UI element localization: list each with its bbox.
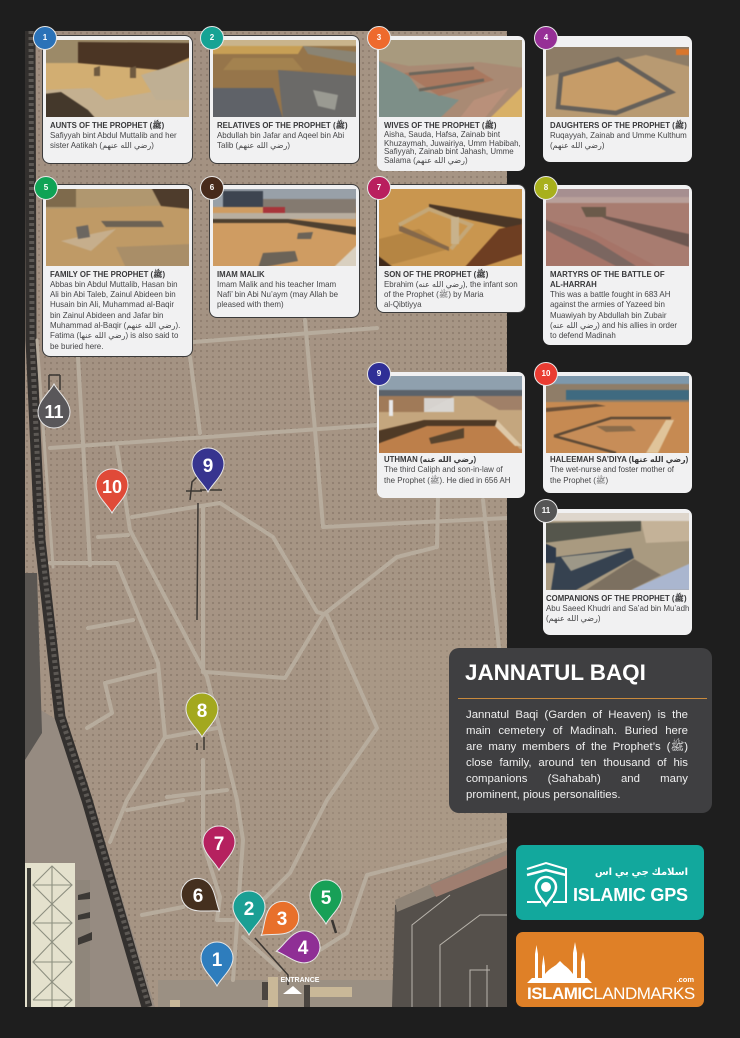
text: daughters xyxy=(550,120,687,150)
text: companions xyxy=(546,592,689,624)
text: wives: WIVES OF THE PROPHET (ﷺ) xyxy=(384,120,497,130)
cemetery pathways xyxy=(37,320,507,980)
text: wives: Salama (رضي الله عنهم) xyxy=(384,156,468,165)
text: family: be buried here. xyxy=(50,342,103,351)
text: wives: Aisha, Sauda, Hafsa, Zainab bint xyxy=(384,130,500,139)
badge 6 xyxy=(200,176,224,200)
text: family: Husain bin Ali, Muhammad al-Baqir xyxy=(50,300,174,309)
badge 11 xyxy=(534,499,558,523)
logo: Islamic GPS xyxy=(516,845,704,920)
text: aunts: Safiyyah bint Abdul Muttalib and her xyxy=(50,131,177,140)
badge 7: 7 xyxy=(377,183,381,192)
pin 11: 11 xyxy=(44,402,64,422)
text: haleemah: the Prophet (ﷺ) xyxy=(550,476,608,485)
text: martyrs: AL-HARRAH xyxy=(550,280,597,289)
card 2: relatives of the prophet xyxy=(210,36,359,163)
mosque roof xyxy=(25,863,92,1018)
aerial map of the cemetery xyxy=(25,31,507,1007)
photo: daughters graves xyxy=(546,47,689,117)
.com: .com xyxy=(676,975,694,984)
text: haleemah xyxy=(550,455,688,485)
entrance marker: ENTRANCE xyxy=(281,977,320,984)
text: son: Ebrahim (رضي الله عنه), the infant son xyxy=(384,280,518,289)
entrance marker xyxy=(281,977,320,994)
description text xyxy=(466,709,688,801)
pin 1: 1 xyxy=(212,950,223,971)
badge 10: 10 xyxy=(542,369,550,378)
text: family: Muhammad al-Baqir (رضي الله عنهم). xyxy=(50,321,180,330)
description text: Jannatul Baqi (Garden of Heaven) is the xyxy=(466,709,688,721)
text: martyrs: against the armies of Yazeed bin xyxy=(550,300,665,309)
text: imam malik: Nafi’ bin Abi Nu’aym (may Allah be xyxy=(217,290,338,299)
photo: martyrs graves xyxy=(546,189,689,266)
card 10: haleemah sa'diya xyxy=(543,372,692,493)
text: relatives: RELATIVES OF THE PROPHET (ﷺ) xyxy=(217,120,348,130)
wordmark: ISLAMIC GPS xyxy=(573,885,688,905)
text: family: FAMILY OF THE PROPHET (ﷺ) xyxy=(50,270,165,278)
text: wives xyxy=(384,120,521,166)
panel: Jannatul Baqi description xyxy=(449,648,712,813)
pin 5: 5 xyxy=(321,888,332,909)
text: imam malik xyxy=(217,270,338,309)
badge 7 xyxy=(367,176,391,200)
badge 10 xyxy=(534,362,558,386)
badge 9: 9 xyxy=(377,369,381,378)
pin 10 xyxy=(96,469,128,513)
pin 3 xyxy=(251,895,305,948)
text: martyrs: to defend Madinah xyxy=(550,331,616,340)
card 1: aunts of the prophet xyxy=(43,36,192,163)
pin 8: 8 xyxy=(197,701,207,722)
icon: mosque silhouette xyxy=(527,942,592,983)
text: martyrs: MARTYRS OF THE BATTLE OF xyxy=(550,270,665,278)
card 11: companions of the prophet xyxy=(543,509,692,635)
pin 10: 10 xyxy=(102,477,122,497)
pin 1 xyxy=(201,942,233,986)
pin 4 xyxy=(274,929,322,967)
badge 3: 3 xyxy=(377,33,381,42)
pin 6: 6 xyxy=(193,886,203,907)
pin 6 xyxy=(175,872,229,924)
wordmark: ISLAMICLANDMARKS xyxy=(527,984,695,1003)
badge 2 xyxy=(200,26,224,50)
text: aunts xyxy=(50,120,177,150)
description text: prominent, pious personalities. xyxy=(466,789,620,801)
text: wives: Safiyyah, Zainab bint Jahash, Umme xyxy=(384,147,514,156)
icon: kaaba pin xyxy=(526,862,567,907)
pin 7 xyxy=(203,826,235,870)
badge 3 xyxy=(367,26,391,50)
text: daughters: (رضي الله عنهم) xyxy=(550,141,604,150)
text: martyrs xyxy=(550,270,677,340)
description text: are many members of the Prophet’s (ﷺ) xyxy=(466,741,688,753)
text: haleemah: The wet-nurse and foster mother of xyxy=(550,465,674,474)
text: martyrs: This was a battle fought in 683 AH xyxy=(550,290,670,299)
text: aunts: sister Aatikah (رضي الله عنهم) xyxy=(50,141,154,150)
description text: close family, around ten thousand of his xyxy=(466,757,688,769)
photo: son grave xyxy=(379,189,522,266)
photo: companions graves xyxy=(546,513,689,590)
text: imam malik: pleased with them) xyxy=(217,300,284,309)
photo: relatives graves xyxy=(213,40,356,117)
text: daughters: Ruqayyah, Zainab and Umme Kulthum xyxy=(550,131,687,140)
pin 5 xyxy=(310,880,342,924)
text: imam malik: Imam Malik and his teacher Imam xyxy=(217,280,336,289)
photo: family graves xyxy=(46,189,189,266)
text: companions: Abu Saeed Khudri and Sa’ad bin Mu’adh xyxy=(546,604,689,613)
pin 9 xyxy=(192,448,224,492)
badge 6: 6 xyxy=(210,183,214,192)
pin 2 xyxy=(233,891,265,935)
text: family: Ali bin Abi Taleb, Zainul Abideen bin xyxy=(50,290,176,299)
card 3: wives of the prophet xyxy=(377,36,525,171)
text: relatives: Abdullah bin Jafar and Aqeel bin Abi xyxy=(217,131,344,140)
badge 8: 8 xyxy=(544,183,548,192)
text: family xyxy=(50,268,180,351)
text: family: bin Zainul Abideen and Jafar bin xyxy=(50,311,163,320)
text: imam malik: IMAM MALIK xyxy=(217,270,265,278)
text: uthman: UTHMAN (رضي الله عنه) xyxy=(384,455,476,464)
pin 11 xyxy=(38,384,70,428)
text: companions: (رضي الله عنهم) xyxy=(546,614,600,623)
card 8: martyrs of the battle of al-harrah xyxy=(543,185,692,345)
pin 4: 4 xyxy=(298,938,309,959)
photo: wives graves xyxy=(379,40,522,117)
description text: companions (Sahabah) and many xyxy=(466,773,688,785)
badge 11: 11 xyxy=(542,506,550,515)
badge 1: 1 xyxy=(43,33,47,42)
card 6: imam malik xyxy=(210,185,359,317)
text: aunts: AUNTS OF THE PROPHET (ﷺ) xyxy=(50,120,164,130)
Arabic wordmark: اسلامك جي بي اس xyxy=(595,867,688,878)
text: haleemah: HALEEMAH SA’DIYA (رضي الله عنها) xyxy=(550,455,688,464)
badge 2: 2 xyxy=(210,33,214,42)
badge 4 xyxy=(534,26,558,50)
pin 8 xyxy=(186,693,218,737)
card 4: daughters of the prophet xyxy=(543,36,692,162)
text: son: al-Qibtiyya xyxy=(384,300,422,309)
pin 3: 3 xyxy=(277,909,287,930)
text: uthman xyxy=(384,455,511,485)
text: wives: Khuzaymah, Juwairiya, Umm Habibah, xyxy=(384,139,521,148)
text: son xyxy=(384,268,518,309)
badge 5: 5 xyxy=(44,183,48,192)
pin 9: 9 xyxy=(203,456,213,477)
heading: JANNATUL BAQI xyxy=(465,660,646,685)
text: companions: COMPANIONS OF THE PROPHET (ﷺ) xyxy=(546,594,687,602)
badge 4: 4 xyxy=(544,33,548,42)
description text: main cemetery of Madinah. Buried here xyxy=(466,725,688,737)
pin 2: 2 xyxy=(244,899,254,920)
text: family: Fatima (رضي الله عنها) is also said to xyxy=(50,331,178,340)
pin 7: 7 xyxy=(214,834,224,855)
badge 1 xyxy=(33,26,57,50)
text: family: Abbas bin Abdul Muttalib, Hasan bin xyxy=(50,280,178,289)
text: martyrs: (رضي الله عنه) and his allies in order xyxy=(550,321,677,330)
badge 8 xyxy=(534,176,558,200)
photo: uthman grave xyxy=(379,376,522,453)
text: daughters: DAUGHTERS OF THE PROPHET (ﷺ) xyxy=(550,120,687,130)
card 5: family of the prophet xyxy=(43,185,192,356)
text: son: of the Prophet (ﷺ) by Maria xyxy=(384,290,484,299)
badge 9 xyxy=(367,362,391,386)
text: son: SON OF THE PROPHET (ﷺ) xyxy=(384,270,488,278)
text: uthman: the Prophet (ﷺ). He died in 656 AH xyxy=(384,476,511,485)
text: uthman: The third Caliph and son-in-law of xyxy=(384,465,503,474)
photo: aunts graves xyxy=(46,40,189,117)
photo: imam malik grave xyxy=(213,189,356,266)
logo: Islamic Landmarks xyxy=(516,932,704,1007)
badge 5 xyxy=(34,176,58,200)
text: relatives xyxy=(217,120,348,150)
text: martyrs: Muawiyah by Abdullah bin Zubair xyxy=(550,311,666,320)
text: relatives: Talib (رضي الله عنهم) xyxy=(217,141,290,150)
card 7: son of the prophet xyxy=(377,185,525,312)
card 9: uthman xyxy=(377,372,525,498)
photo: haleemah grave xyxy=(546,376,689,453)
